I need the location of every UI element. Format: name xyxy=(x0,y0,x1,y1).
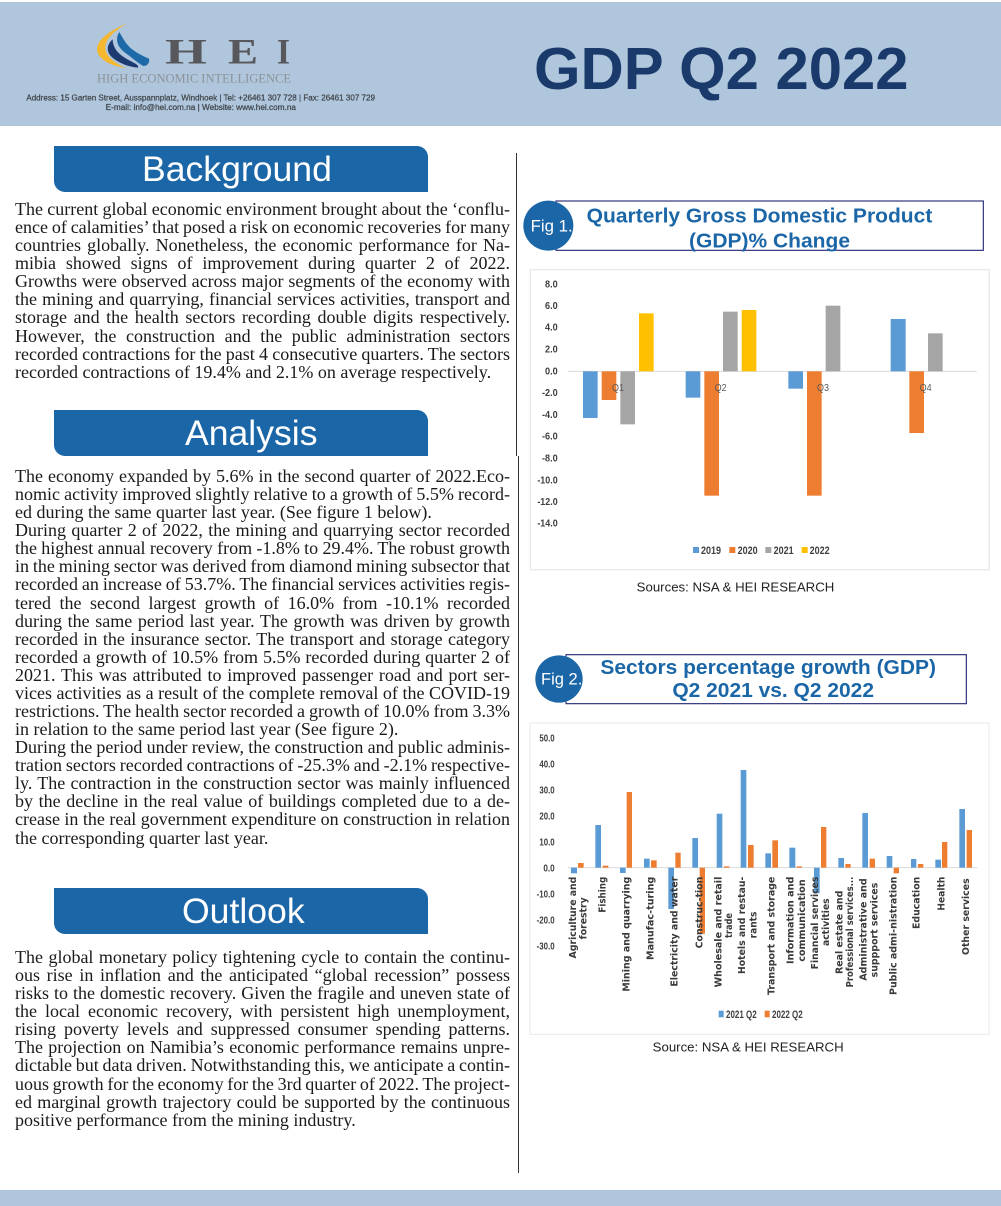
y axis labels: 4.0 xyxy=(545,323,558,334)
header band xyxy=(0,2,1001,126)
heading: Background: Background xyxy=(142,149,332,189)
bars 2022 xyxy=(639,310,756,371)
sector labels: Hotels and restau- xyxy=(737,877,748,974)
sector labels: trade xyxy=(724,913,735,938)
text block: analysis: ly. The contraction in the construction sector was mainly influenced xyxy=(15,773,510,793)
panel: figure 1 xyxy=(523,200,990,594)
logo wordmark xyxy=(165,32,290,72)
text block: analysis: During the period under review, the construction and public adminis- xyxy=(15,737,510,757)
y axis labels: 30.0 xyxy=(539,786,555,797)
text block: outlook: the local economic recovery, with persistent high unemployment, xyxy=(15,1001,510,1021)
figure 2 badge xyxy=(535,655,583,703)
column divider xyxy=(516,153,519,1173)
figure 2 source: Source: NSA & HEI RESEARCH xyxy=(653,1040,844,1055)
panel: figure 2 xyxy=(530,654,990,1055)
text block: background: recorded contractions of 19.4% and 2.1% on average respectively. xyxy=(15,362,491,382)
text block: outlook: positive performance from the mining industry. xyxy=(15,1110,356,1130)
sector labels xyxy=(568,876,972,995)
figure 1 badge: Fig 1. xyxy=(531,216,573,235)
text block: outlook: ed marginal growth trajectory could be supported by the continuous xyxy=(15,1092,510,1112)
chart frame xyxy=(530,270,989,570)
y axis labels: -14.0 xyxy=(537,519,558,530)
zero axis xyxy=(568,866,977,869)
text block: outlook: ous rise in inflation and the anticipated “global recession” possess xyxy=(15,965,510,985)
text block: background xyxy=(15,199,510,382)
sector labels: Administrative and xyxy=(858,878,869,981)
zero axis xyxy=(568,370,977,373)
y axis labels: 8.0 xyxy=(545,279,558,290)
sector labels: forestry xyxy=(578,897,589,939)
logo and address xyxy=(26,24,375,112)
legend: 2022 Q2 xyxy=(772,1009,803,1021)
y axis labels: -30.0 xyxy=(537,941,555,952)
text block: analysis: the corresponding quarter last year. xyxy=(15,828,268,848)
text block: analysis: during the same period last year. The growth was driven by growth xyxy=(15,611,510,631)
figure 1 title box: Quarterly Gross Domestic Product xyxy=(587,205,933,227)
text block: analysis: ed during the same quarter last year. (See figure 1 below). xyxy=(15,502,432,522)
sector labels: Public admi-nistration xyxy=(888,877,899,995)
figure 2 badge: Fig 2. xyxy=(541,669,582,688)
text block: outlook: dictable but data driven. Notwithstanding this, we anticipate a contin- xyxy=(15,1055,510,1075)
heading: Outlook xyxy=(54,888,428,934)
quarter labels xyxy=(612,383,932,394)
text block: analysis: by the decline in the real value of buildings completed due to a de- xyxy=(15,791,510,811)
text block: outlook: rising poverty levels and suppressed consumer spending patterns. xyxy=(15,1019,510,1039)
legend: 2022 xyxy=(810,545,830,557)
y axis labels: -8.0 xyxy=(542,453,558,464)
sector labels: rants xyxy=(748,911,759,938)
y axis labels: 40.0 xyxy=(539,760,555,771)
sector labels: suppport services xyxy=(869,882,880,977)
quarter labels: Q1 xyxy=(612,383,624,394)
text block: analysis: in relation to the same period last year (See figure 2). xyxy=(15,719,398,739)
logo wordmark: E xyxy=(228,32,258,72)
legend: 2021 xyxy=(774,545,794,557)
sector labels: Electricity and water xyxy=(670,876,681,987)
text block: analysis: crease in the real government expenditure on construction in relation xyxy=(15,809,510,829)
sector labels: Transport and storage xyxy=(767,877,778,995)
y axis labels: -10.0 xyxy=(537,475,558,486)
figure 2 title box: Q2 2021 vs. Q2 2022 xyxy=(672,680,874,702)
y axis labels: -4.0 xyxy=(542,410,558,421)
bars 2022 Q2 xyxy=(578,792,972,934)
text block: background: recorded contractions for the past 4 consecutive quarters. The sectors xyxy=(15,344,510,364)
heading: Background xyxy=(54,146,428,192)
quarter labels: Q3 xyxy=(817,383,829,394)
address line: Address: 15 Garten Street, Ausspannplatz, Windhoek | Tel: +26461 307 728 | Fax: 26461 307 729 xyxy=(26,92,375,102)
sector labels: Information and xyxy=(786,877,797,964)
y axis labels xyxy=(537,279,558,530)
text block: analysis: recorded in the insurance sector. The transport and storage category xyxy=(15,629,510,649)
chart frame xyxy=(530,723,989,1034)
text block: analysis: the highest annual recovery from -1.8% to 29.4%. The robust growth xyxy=(15,538,510,558)
y axis labels: 50.0 xyxy=(539,734,555,745)
figure 1 title box: (GDP)% Change xyxy=(689,230,850,252)
bars 2019 xyxy=(583,319,906,418)
legend xyxy=(693,545,830,557)
y axis labels: 10.0 xyxy=(539,838,555,849)
sector labels: Wholesale and retail xyxy=(713,877,724,987)
text block: background: storage and the health sectors recording double digits respectively. xyxy=(15,307,510,327)
sector labels: Real estate and xyxy=(834,891,845,974)
sector labels: communication xyxy=(797,879,808,962)
bars 2021 xyxy=(620,306,943,424)
icon: logo swoosh xyxy=(97,23,149,68)
figure 1 source: Sources: NSA & HEI RESEARCH xyxy=(637,579,834,594)
text block: outlook: risks to the domestic recovery. Given the fragile and uneven state of xyxy=(15,983,510,1003)
figure 2 title box xyxy=(566,655,966,704)
text block: analysis: vices activities as a result of the complete removal of the COVID-19 xyxy=(15,683,510,703)
legend xyxy=(719,1009,803,1021)
y axis labels: 0.0 xyxy=(543,864,555,875)
legend: 2021 Q2 xyxy=(726,1009,757,1021)
text block: analysis: The economy expanded by 5.6% in the second quarter of 2022.Eco- xyxy=(15,466,510,486)
text block: background: ence of calamities’ that posed a risk on economic recoveries for many xyxy=(15,217,510,237)
figure 2 title box: Sectors percentage growth (GDP) xyxy=(600,657,936,679)
text block: background: Growths were observed across major segments of the economy with xyxy=(15,271,510,291)
sector labels: Other services xyxy=(961,878,972,955)
contact line: E-mail: info@hei.com.na | Website: www.hei.com.na xyxy=(106,102,296,112)
text block: outlook xyxy=(15,947,510,1130)
text block: analysis: nomic activity improved slightly relative to a growth of 5.5% record- xyxy=(15,484,510,504)
quarter labels: Q2 xyxy=(715,383,727,394)
logo wordmark: H xyxy=(165,32,207,72)
y axis labels: -20.0 xyxy=(537,915,555,926)
sector labels: Financial services xyxy=(810,876,821,969)
text block: background: However, the construction and the public administration sectors xyxy=(15,326,510,346)
sector labels: Fishing xyxy=(598,877,609,913)
legend: 2020 xyxy=(738,545,758,557)
bars 2020 xyxy=(602,371,924,496)
heading: Analysis xyxy=(54,410,428,456)
heading: Outlook: Outlook xyxy=(182,891,305,931)
y axis labels: -10.0 xyxy=(537,889,555,900)
figure 1 badge xyxy=(523,201,573,251)
sector labels: Manufac-turing xyxy=(646,877,657,960)
sector labels: Agriculture and xyxy=(568,877,579,958)
text block: background: countries globally. Nonetheless, the economic performance for Na- xyxy=(15,235,510,255)
sector labels: Mining and quarrying xyxy=(622,877,633,992)
y axis labels: -6.0 xyxy=(542,432,558,443)
main title: GDP Q2 2022 xyxy=(534,35,909,102)
heading: Analysis: Analysis xyxy=(185,413,317,453)
figure 1 title box xyxy=(556,201,983,252)
y axis labels: 2.0 xyxy=(545,345,558,356)
text block: background: The current global economic environment brought about the ‘conflu- xyxy=(15,199,510,219)
text block: analysis: restrictions. The health sector recorded a growth of 10.0% from 3.3% xyxy=(15,701,510,721)
y axis labels xyxy=(537,734,555,952)
text block: background: the mining and quarrying, financial services activities, transport and xyxy=(15,289,510,309)
text block: analysis: During quarter 2 of 2022, the mining and quarrying sector recorded xyxy=(15,520,510,540)
text block: analysis: recorded a growth of 10.5% from 5.5% recorded during quarter 2 of xyxy=(15,647,510,667)
sector labels: Education xyxy=(912,877,923,929)
sector labels: Health xyxy=(937,877,948,911)
legend: 2019 xyxy=(701,545,721,557)
footer band xyxy=(0,1190,1001,1206)
y axis labels: -2.0 xyxy=(542,388,558,399)
sector labels: Professional services... xyxy=(845,877,856,987)
text block: background: mibia showed signs of improvement during quarter 2 of 2022. xyxy=(15,253,510,273)
text block: analysis: 2021. This was attributed to improved passenger road and port ser- xyxy=(15,665,510,685)
logo wordmark: I xyxy=(277,32,290,72)
bars 2021 Q2 xyxy=(571,770,965,909)
text block: analysis: recorded an increase of 53.7%. The financial services activities regis- xyxy=(15,574,510,594)
y axis labels: -12.0 xyxy=(537,497,558,508)
text block: outlook: The global monetary policy tightening cycle to contain the continu- xyxy=(15,947,510,967)
quarter labels: Q4 xyxy=(920,383,932,394)
y axis labels: 6.0 xyxy=(545,301,558,312)
text block: outlook: The projection on Namibia’s economic performance remains unpre- xyxy=(15,1037,510,1057)
y axis labels: 20.0 xyxy=(539,812,555,823)
text block: analysis: tered the second largest growth of 16.0% from -10.1% recorded xyxy=(15,593,510,613)
text block: analysis: in the mining sector was derived from diamond mining subsector that xyxy=(15,556,510,576)
logo tagline: HIGH ECONOMIC INTELLIGENCE xyxy=(97,71,291,85)
sector labels: Construc-tion xyxy=(694,877,705,948)
text block: analysis xyxy=(15,466,510,848)
y axis labels: 0.0 xyxy=(545,366,558,377)
text block: analysis: tration sectors recorded contractions of -25.3% and -2.1% respective- xyxy=(15,755,510,775)
text block: outlook: uous growth for the economy for the 3rd quarter of 2022. The project- xyxy=(15,1074,510,1094)
sector labels: activities xyxy=(821,898,832,946)
